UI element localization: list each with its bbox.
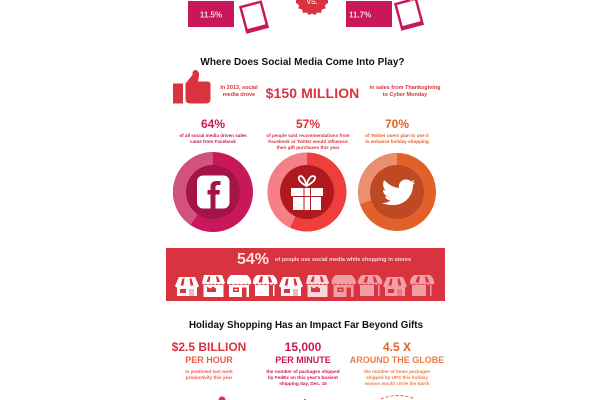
text: gift caption: their gift purchases this year — [277, 144, 339, 150]
text: sales — [370, 85, 440, 98]
text: fedex — [266, 369, 340, 386]
stat: around the globe: AROUND THE GLOBE — [350, 355, 444, 365]
store 9 — [383, 277, 407, 296]
text: sales: to Cyber Monday — [383, 92, 427, 98]
store 10 — [410, 275, 434, 296]
store 5 — [279, 277, 303, 296]
text: productivity — [185, 369, 233, 380]
text: facebook caption: came from Facebook — [190, 138, 236, 144]
text: fedex: by FedEx on this year's busiest — [268, 375, 338, 380]
stat box 11.7% — [346, 1, 392, 27]
text: productivity: productivity this year — [186, 375, 232, 380]
text: ups — [364, 369, 430, 386]
text: in 2013 — [220, 85, 258, 98]
text: fedex: the number of packages shipped — [266, 369, 340, 374]
text: sales: in sales from Thanksgiving — [370, 85, 440, 91]
text: twitter caption: of Twitter users plan to use it — [365, 132, 429, 138]
text: twitter caption — [365, 132, 429, 144]
donut: gift 57% — [267, 152, 346, 232]
text: ups: the number of times packages — [364, 369, 430, 374]
store 7 — [332, 275, 356, 297]
store 8 — [358, 275, 382, 296]
store 6 — [306, 275, 329, 297]
stat: 2.5 billion: $2.5 BILLION — [172, 340, 246, 354]
icon: gift box — [291, 176, 323, 210]
text: ups: season would circle the Earth — [365, 381, 429, 386]
stat: per minute: PER MINUTE — [275, 355, 331, 365]
icon: tablet left — [240, 1, 269, 33]
stat: 70%: 70% — [385, 116, 409, 130]
text: $150 million: $150 MILLION — [266, 85, 359, 101]
store 2 — [202, 275, 225, 297]
badge: versus — [296, 0, 328, 15]
store 1 — [175, 277, 199, 296]
stat box 11.5%: 11.5% — [200, 10, 222, 20]
text: gift caption — [266, 132, 350, 150]
text: gift caption: Facebook or Twitter would influence — [268, 138, 348, 144]
text: facebook caption: of all social media driven sales — [179, 132, 247, 138]
stat: 57%: 57% — [296, 116, 320, 130]
text: in 2013: In 2013, social — [220, 85, 258, 91]
donut: Twitter 70% — [358, 153, 436, 231]
stat: 15,000: 15,000 — [285, 340, 321, 354]
heading: social media: Where Does Social Media Come Into Play? — [200, 56, 405, 68]
text: gift caption: of people said recommendations from — [266, 132, 350, 138]
stat box 11.5% — [188, 1, 234, 27]
text: twitter caption: to enhance holiday shopping — [365, 138, 429, 144]
stat: 4.5 x: 4.5 X — [383, 340, 411, 354]
text: facebook caption — [179, 132, 247, 144]
stat: 54%: 54% — [237, 251, 269, 268]
icon: tablet right — [394, 0, 424, 30]
icon: twitter bird — [382, 179, 415, 205]
panel: store banner — [166, 248, 445, 301]
text: fedex: shipping day, Dec. 15 — [279, 381, 327, 386]
bottom icons partial — [218, 396, 415, 400]
stat: per hour: PER HOUR — [185, 355, 233, 365]
icon: facebook logo — [197, 176, 230, 208]
icon: thumbs up — [173, 70, 211, 104]
text: in 2013: media drove — [223, 92, 255, 98]
store 4 — [253, 275, 278, 296]
store 3 — [227, 275, 252, 297]
stores row — [175, 275, 434, 297]
text: ups: shipped by UPS this holiday — [366, 375, 428, 380]
stat box 11.7%: 11.7% — [349, 10, 371, 20]
donut: Facebook 64% — [173, 152, 253, 232]
text: productivity: in predicted lost work — [185, 369, 233, 374]
heading: holiday shopping: Holiday Shopping Has an Impact Far Beyond Gifts — [189, 320, 423, 330]
text: 54% caption: of people use social media while shopping in stores — [275, 257, 411, 263]
stat: 64%: 64% — [201, 116, 225, 130]
